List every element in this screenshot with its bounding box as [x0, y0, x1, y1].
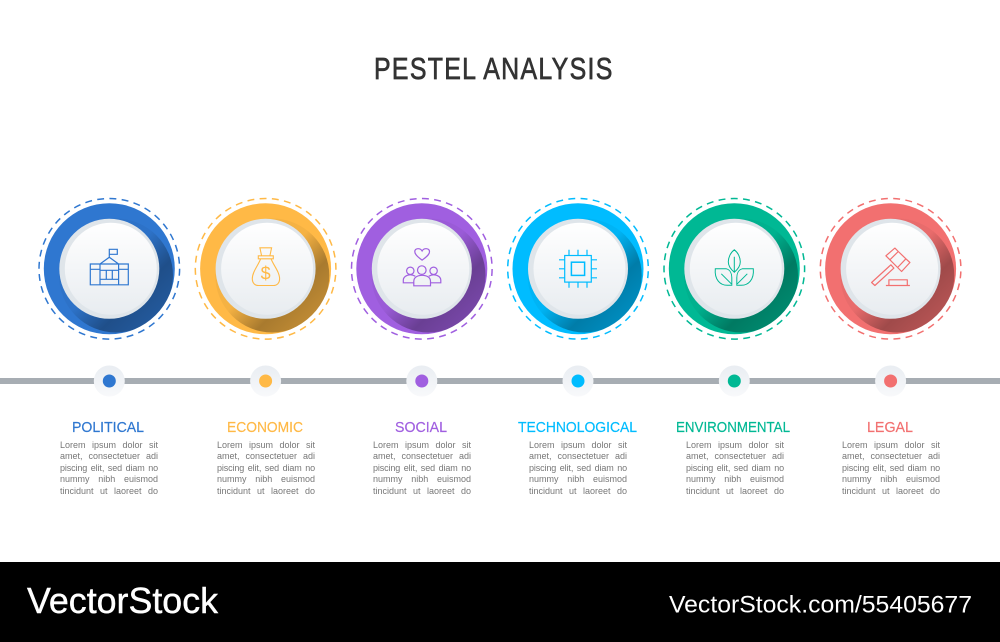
heading: legal: LEGAL [867, 419, 913, 436]
heading: technological: TECHNOLOGICAL [518, 419, 637, 436]
text block: environmental: tincidunt ut laoreet do [686, 486, 784, 496]
text block: social: piscing elit, sed diam no [373, 463, 471, 473]
text block: economic: nummy nibh euismod [217, 474, 315, 484]
text block: political [60, 440, 158, 496]
heading: environmental: ENVIRONMENTAL [676, 419, 790, 436]
heading: economic: ECONOMIC [227, 419, 303, 436]
node: technological [562, 366, 594, 396]
icon: government building [90, 249, 128, 285]
footer band [0, 562, 1000, 642]
text block: political: piscing elit, sed diam no [60, 463, 158, 473]
text block: social: amet, consectetuer adi [373, 451, 471, 461]
text block: legal [842, 440, 940, 496]
node: legal [875, 366, 906, 396]
text block: technological: tincidunt ut laoreet do [529, 486, 627, 496]
heading: political: POLITICAL [72, 419, 144, 436]
icon: money bag: $ [261, 263, 271, 283]
text block: social: nummy nibh euismod [373, 474, 471, 484]
heading: social: SOCIAL [395, 419, 447, 436]
text block: economic: amet, consectetuer adi [217, 451, 315, 461]
text block: political: nummy nibh euismod [60, 474, 158, 484]
text block: social: tincidunt ut laoreet do [373, 486, 471, 496]
icon: leaves [715, 250, 753, 285]
text block: environmental: nummy nibh euismod [686, 474, 784, 484]
node: economic [250, 366, 281, 396]
text block: political: amet, consectetuer adi [60, 451, 158, 461]
text block: environmental: amet, consectetuer adi [686, 451, 784, 461]
node: social [406, 366, 437, 396]
text block: political: Lorem ipsum dolor sit [60, 440, 158, 450]
text block: technological [529, 440, 627, 496]
medallion: legal [820, 198, 962, 340]
medallion: political [39, 198, 180, 339]
text block: legal: tincidunt ut laoreet do [842, 486, 940, 496]
icon: microchip [559, 250, 597, 288]
text block: legal: piscing elit, sed diam no [842, 463, 940, 473]
text block: technological: Lorem ipsum dolor sit [529, 440, 627, 450]
text block: economic: piscing elit, sed diam no [217, 463, 315, 473]
medallion: economic [194, 198, 337, 340]
text block: environmental [686, 440, 784, 496]
node: political [94, 366, 125, 396]
text block: social: Lorem ipsum dolor sit [373, 440, 471, 450]
text block: technological: nummy nibh euismod [529, 474, 627, 484]
title: PESTEL ANALYSIS [374, 52, 614, 86]
icon: people and heart [403, 249, 441, 286]
text block: social [373, 440, 471, 496]
footer logo text: VectorStock [27, 580, 219, 621]
text block: political: tincidunt ut laoreet do [60, 486, 158, 496]
text block: environmental: Lorem ipsum dolor sit [686, 440, 784, 450]
node: environmental [719, 366, 750, 396]
medallion: social [350, 198, 493, 340]
footer url text: VectorStock.com/55405677 [669, 592, 972, 618]
text block: legal: amet, consectetuer adi [842, 451, 940, 461]
text block: technological: amet, consectetuer adi [529, 451, 627, 461]
icon: gavel [872, 248, 910, 286]
text block: economic: Lorem ipsum dolor sit [217, 440, 315, 450]
medallion: environmental [663, 198, 806, 340]
text block: technological: piscing elit, sed diam no [529, 463, 627, 473]
text block: economic: tincidunt ut laoreet do [217, 486, 315, 496]
text block: economic [217, 440, 315, 496]
icon: money bag [252, 248, 280, 286]
timeline [0, 366, 1000, 396]
text block: legal: Lorem ipsum dolor sit [842, 440, 940, 450]
text block: environmental: piscing elit, sed diam no [686, 463, 784, 473]
text block: legal: nummy nibh euismod [842, 474, 940, 484]
medallion: technological [505, 196, 651, 342]
